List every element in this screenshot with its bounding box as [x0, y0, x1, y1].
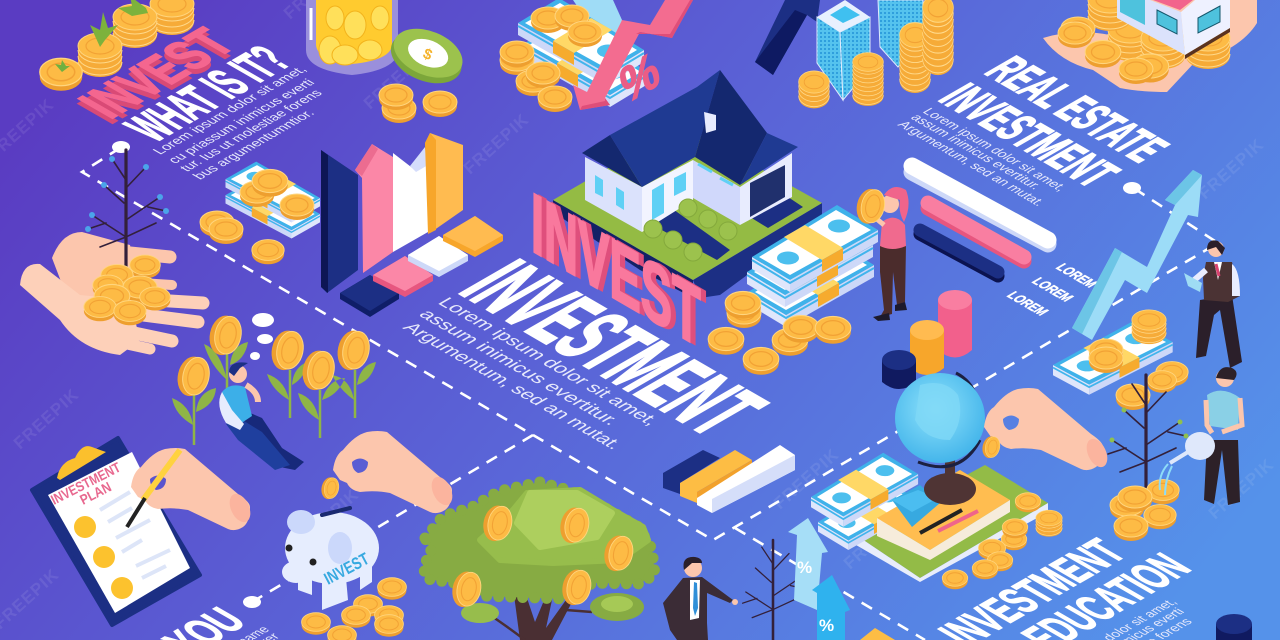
- icon: hand with coin on piggy: [319, 431, 456, 513]
- floor tile pink: [373, 256, 433, 297]
- panel: money with coins right: [1053, 310, 1188, 395]
- icon: bare tree bottom: [743, 540, 805, 640]
- icon: green chip: $: [421, 45, 435, 64]
- bars chart: horizontal capsules: [912, 166, 1048, 276]
- icon: hand with coin right: [980, 388, 1111, 470]
- watermarks: FREEPIK: [1205, 455, 1278, 523]
- text block: investment: assum inimicus evertitur.: [414, 307, 624, 429]
- watermarks: FREEPIK: [770, 445, 843, 513]
- watermarks: FREEPIK: [840, 505, 913, 573]
- labels: lorem: [1003, 261, 1101, 318]
- figure: businessman with tablet: [1184, 240, 1242, 368]
- panel: money and falling arrow: [500, 0, 693, 115]
- panel: money with coins left: [200, 162, 320, 264]
- bar orange bottom: [860, 628, 895, 640]
- text block: investment: Lorem ipsum dolor sit amet,: [433, 295, 664, 429]
- cylinder orange: [910, 320, 944, 375]
- arrow: rising zigzag: [1072, 170, 1202, 340]
- coins near piggy: [302, 578, 406, 640]
- plan title: INVESTMENT: [48, 459, 123, 508]
- panel: money plants and thinking man: [172, 313, 376, 470]
- text block: what is it: bus argumentumntior.: [189, 107, 318, 182]
- text block: real estate: Argumentum, sed an mutat.: [894, 118, 1049, 208]
- heading: real estate investment: INVESTMENT: [927, 76, 1131, 195]
- panel: hands with tree and coins: [20, 150, 203, 355]
- icon: green chip: [383, 19, 471, 93]
- icon: percent arrows: %: [797, 558, 812, 577]
- bars: bottom center: [663, 445, 795, 513]
- labels: lorem: LOREM: [1003, 289, 1052, 318]
- panel: center money stacks: [708, 205, 878, 375]
- cylinder pink: [938, 290, 972, 358]
- floor tile navy: [340, 275, 399, 317]
- icon: percent arrows: [788, 518, 850, 640]
- icon: bare tree: [85, 150, 169, 275]
- figure: woman with coin: [854, 187, 909, 321]
- capsule pink: [928, 203, 1024, 261]
- figure: woman watering: [1160, 367, 1242, 505]
- floor tile white: [408, 236, 468, 277]
- panel: skyscrapers with coin stacks: [755, 0, 953, 108]
- text block: what is it: tur. Ius ut molestiae forens: [176, 87, 326, 174]
- panel: money tree: [423, 482, 655, 640]
- coins near jar: [379, 84, 457, 123]
- icon: hand with pen: [127, 448, 254, 530]
- panel: tree with coins: [1108, 375, 1188, 541]
- cylinder navy: [882, 350, 916, 389]
- heading: invest 3d letters: [531, 174, 706, 368]
- labels: lorem: LOREM: [1052, 261, 1101, 290]
- foliage: [423, 482, 655, 599]
- text block: what is it: cu priassum inimicus everti: [164, 76, 318, 166]
- heading: invest 3d letters: INVEST: [531, 174, 701, 366]
- text block: real estate: Lorem ipsum dolor sit amet,: [919, 105, 1071, 193]
- floor tile orange: [443, 216, 503, 257]
- heading: invest pink 3d: [66, 20, 249, 132]
- icon: piggy bank: INVEST: [321, 549, 373, 589]
- text block: what is it: Lorem ipsum dolor sit amet,: [149, 63, 310, 157]
- plan title: PLAN: [77, 478, 114, 508]
- watermarks: FREEPIK: [290, 485, 363, 553]
- bar cylinders: [882, 290, 972, 389]
- panel: what is it coins with sprouts: [40, 0, 194, 91]
- thought cloud: [250, 313, 274, 360]
- clip: [57, 446, 106, 480]
- bar white: [697, 445, 795, 513]
- bar orange: [680, 450, 752, 503]
- figure: man in suit: [663, 557, 738, 640]
- panel: house on green lot: [553, 70, 822, 298]
- text block: investment: [398, 295, 664, 453]
- heading: real estate investment: [927, 49, 1180, 195]
- capsule white: [912, 166, 1048, 244]
- labels: lorem: LOREM: [1028, 275, 1077, 304]
- panel: hands holding house: [1043, 0, 1257, 92]
- icon: piggy bank: [282, 508, 379, 610]
- arrow: falling: [573, 0, 693, 110]
- heading: investment education: [927, 532, 1203, 640]
- watermarks: FREEPIK: [10, 385, 83, 453]
- plants: [172, 342, 376, 445]
- heading: investment: INVESTMENT: [438, 247, 788, 449]
- bar chart: arrows columns: [321, 133, 503, 317]
- bar navy: [663, 450, 720, 494]
- dashed connector lines: [82, 148, 1218, 640]
- watermarks: FREEPIK: [460, 110, 533, 178]
- text block: investment: Argumentum, sed an mutat.: [398, 320, 627, 453]
- node dots: [112, 141, 1141, 608]
- icon: small house: [1117, 0, 1230, 59]
- icon: percent arrows: %: [819, 616, 834, 635]
- icon: coin jar: [306, 0, 398, 75]
- figure: sitting man: [219, 362, 304, 470]
- panel: investment plan clipboard: [32, 438, 200, 625]
- capsule navy: [920, 230, 998, 276]
- cylinder navy bottom right: [1216, 614, 1252, 640]
- percent sign: %: [616, 41, 664, 115]
- heading: invest 3d letters: INVEST: [536, 176, 706, 368]
- watermarks: FREEPIK: [360, 45, 433, 113]
- watermarks: FREEPIK: [1195, 135, 1268, 203]
- text block: real estate: assum inimicus evertitur.: [907, 111, 1046, 192]
- panel: globe on books: [811, 373, 1062, 589]
- watermarks: FREEPIK: [635, 85, 708, 153]
